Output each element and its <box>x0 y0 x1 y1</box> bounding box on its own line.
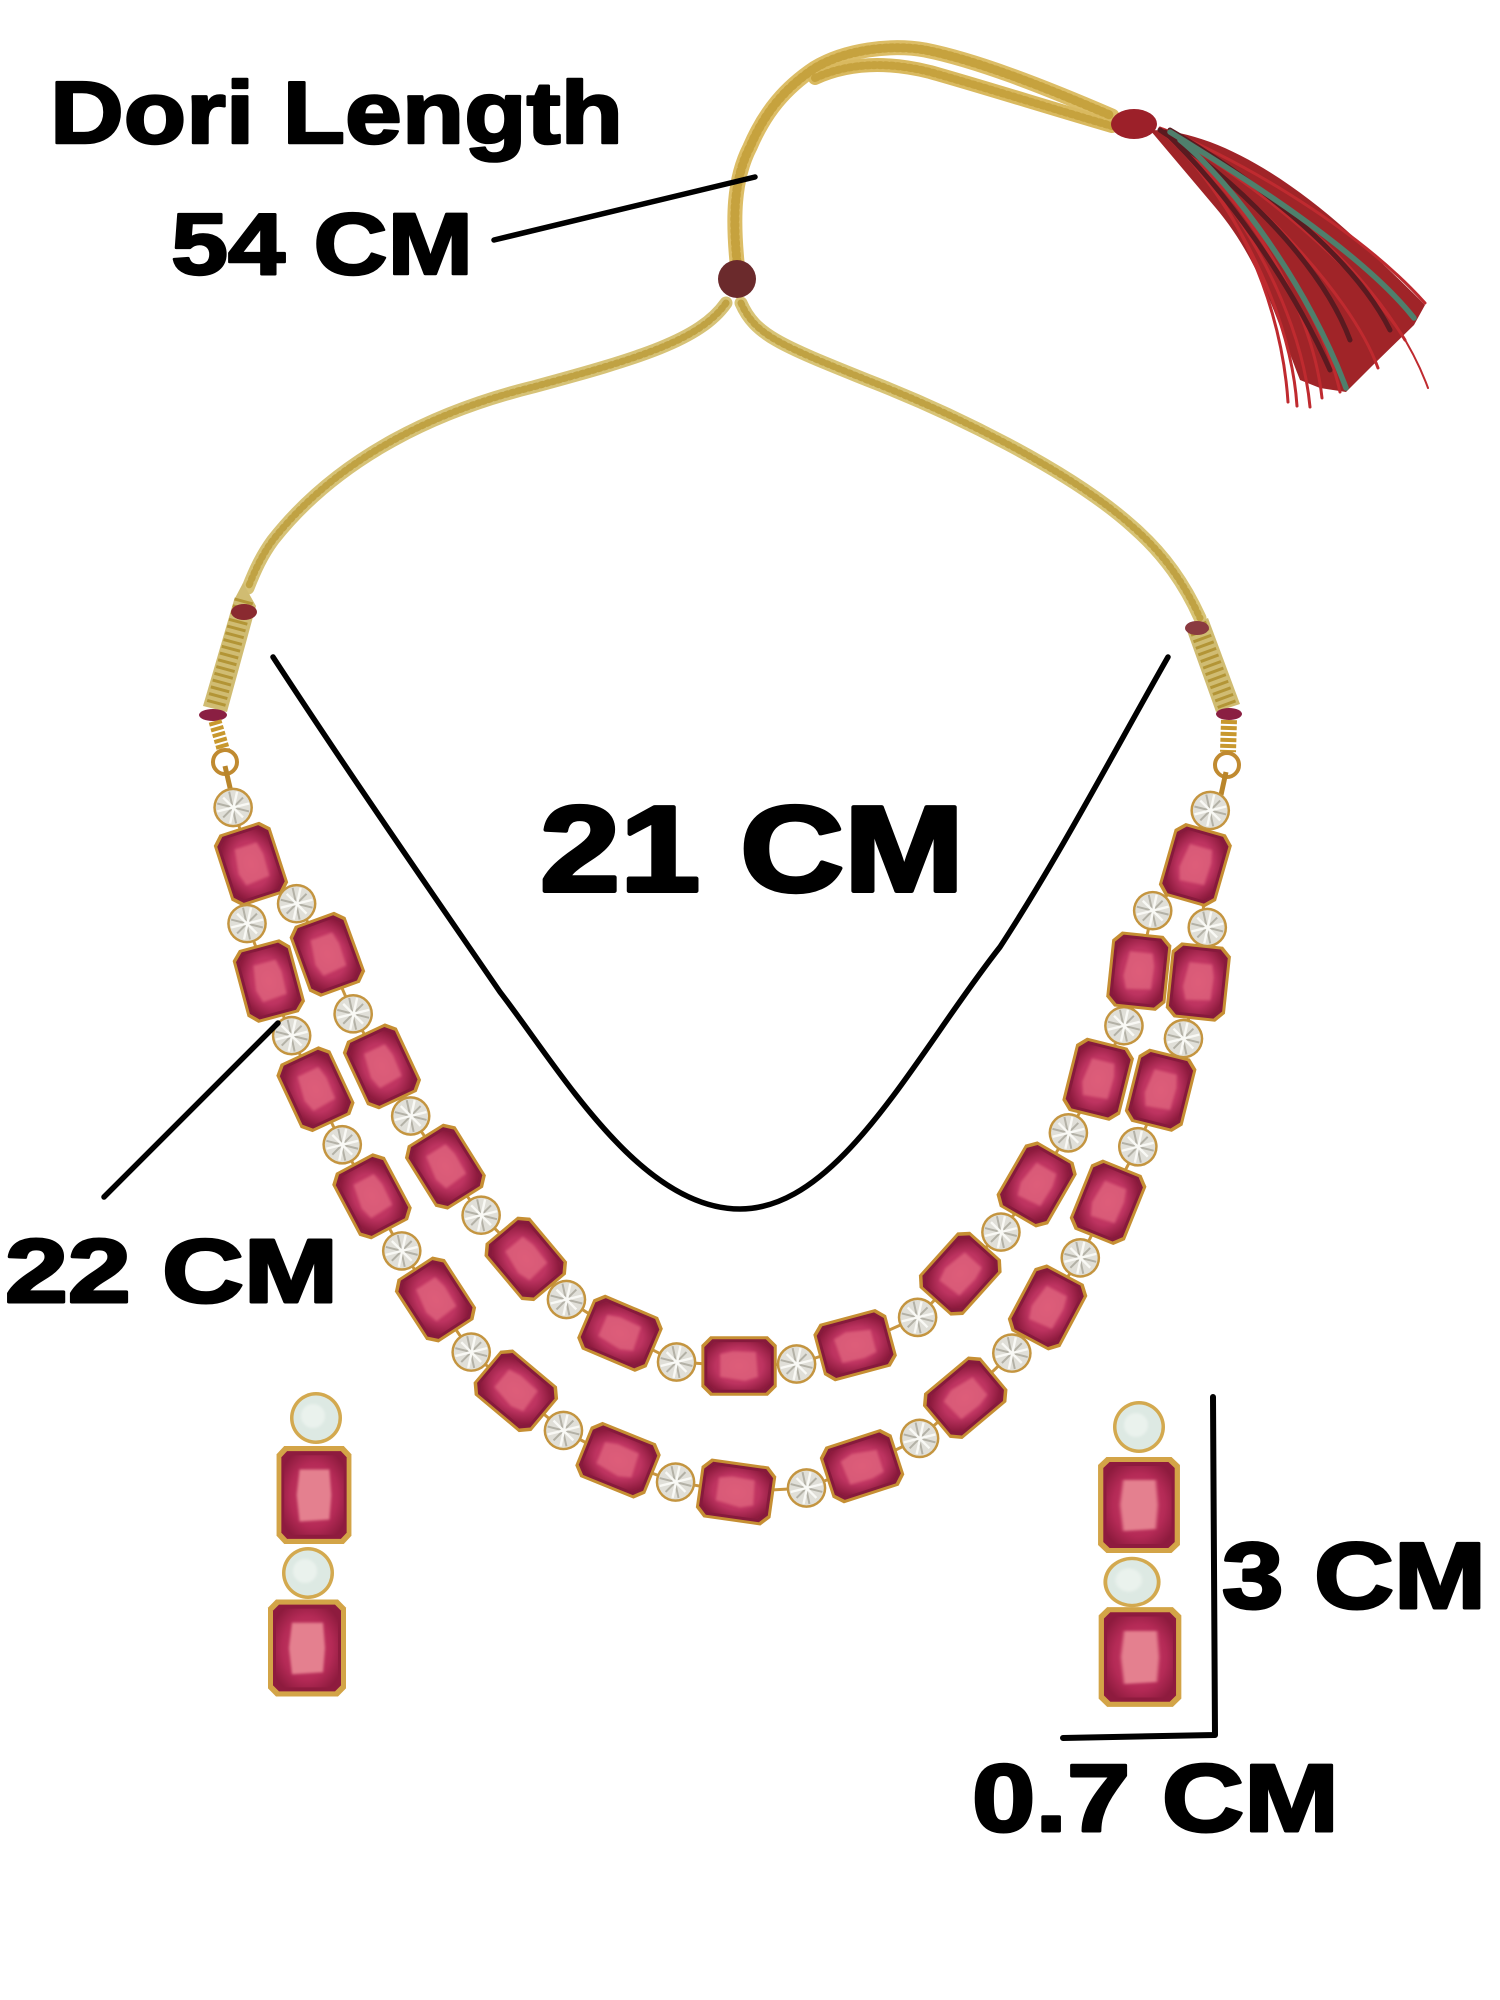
left earring <box>268 1392 351 1696</box>
label: 21 cm: 21 CM <box>540 781 964 917</box>
label: 22 cm: 22 CM <box>5 1222 338 1322</box>
right earring <box>1098 1401 1181 1707</box>
right sleeve and clasp <box>1185 618 1242 795</box>
cord: left neck strand <box>248 303 726 588</box>
cord: right neck strand <box>741 303 1200 618</box>
necklace: lower outer strand <box>227 904 1232 1527</box>
label: 54 cm: 54 CM <box>171 196 473 293</box>
bead <box>718 260 756 298</box>
necklace <box>211 788 1234 1527</box>
label: 3 cm: 3 CM <box>1222 1523 1486 1628</box>
label: 0.7 cm: 0.7 CM <box>972 1745 1339 1852</box>
left sleeve and clasp <box>199 583 257 792</box>
curve: 21 cm neck measurement <box>273 657 1168 1209</box>
necklace: top joint stones <box>211 788 1234 909</box>
leader line: dori length <box>494 177 755 240</box>
necklace: upper inner strand <box>277 884 1173 1396</box>
label: dori length: Dori Length <box>50 63 623 162</box>
leader line: 22 cm <box>104 1023 278 1197</box>
cord: upper dori loop to tassel <box>735 48 1112 262</box>
tassel knot <box>1111 109 1157 139</box>
tassel <box>1150 128 1428 407</box>
bracket: earring height and width <box>1063 1397 1215 1738</box>
